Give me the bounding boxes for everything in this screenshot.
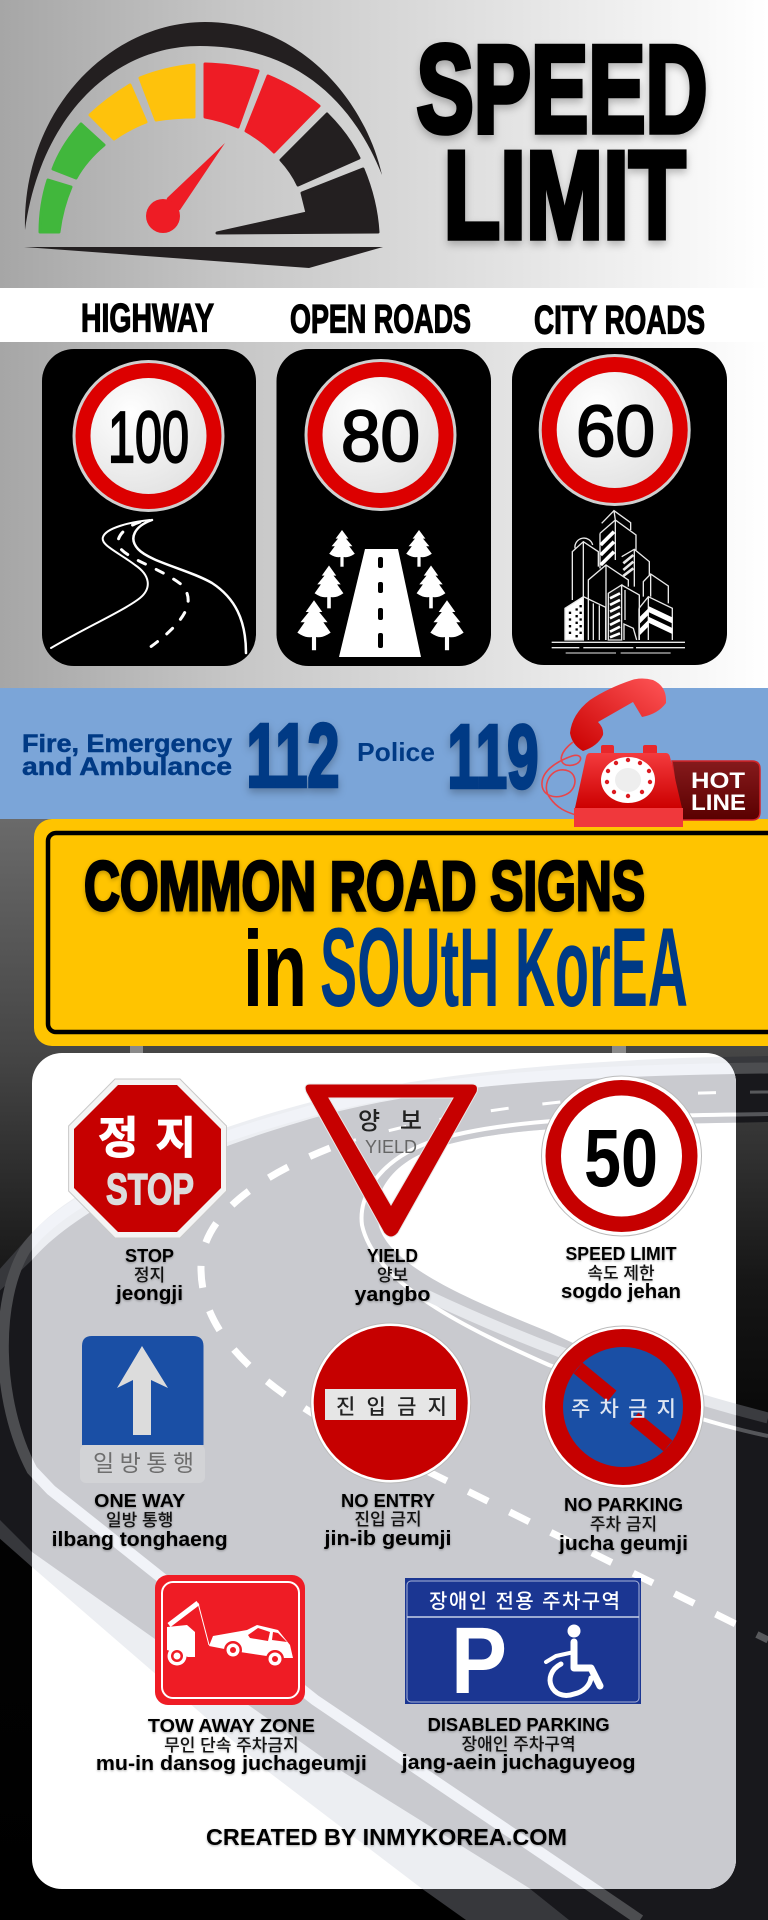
title: speed limit: LIMIT <box>444 127 686 265</box>
label: yield <box>354 1246 430 1306</box>
icon: city skyline <box>552 511 685 653</box>
panel: road signs <box>32 1053 736 1889</box>
label: tow away zone <box>96 1716 367 1775</box>
sign: 60 <box>539 354 691 506</box>
icon: wheelchair <box>546 1624 600 1695</box>
label: tow away zone: mu-in dansog juchageumji <box>96 1753 367 1775</box>
label: one way: 일방 통행 <box>106 1511 173 1530</box>
sign: stop: 정 지 <box>98 1114 196 1163</box>
sign: one way: 일방통행 <box>93 1450 194 1476</box>
label: no parking <box>558 1495 688 1555</box>
sign: one way <box>80 1336 205 1483</box>
label: no entry: NO ENTRY <box>341 1491 435 1511</box>
label: disabled parking: 장애인 주차구역 <box>461 1735 576 1754</box>
panel: emergency numbers band <box>0 688 768 819</box>
sign: no entry <box>311 1323 471 1483</box>
icon: hotline telephone <box>542 678 760 827</box>
sign: disabled parking: P <box>451 1608 507 1714</box>
text: fire, emergency and ambulance: Fire, Emergency <box>22 730 232 758</box>
sign: speed limit 50 <box>542 1076 702 1236</box>
label: stop <box>115 1246 183 1305</box>
sign: no parking: 주 차 금 지 <box>571 1398 676 1421</box>
icon: handset <box>570 678 666 751</box>
label: speed limit <box>561 1244 681 1303</box>
header background <box>0 0 768 288</box>
label: no parking: 주차 금지 <box>590 1515 657 1534</box>
sign: yield: 양 보 <box>358 1108 422 1135</box>
label strip background <box>0 288 768 342</box>
label: disabled parking: jang-aein juchaguyeog <box>401 1752 636 1774</box>
heading: open roads: OPEN ROADS <box>290 298 471 342</box>
label: no entry: jin-ib geumji <box>323 1528 452 1550</box>
credit: CREATED BY INMYKOREA.COM <box>206 1824 567 1850</box>
sign: 80 <box>304 359 456 511</box>
panel: open roads card <box>276 349 491 666</box>
sign: 100 <box>72 360 224 512</box>
label: speed limit: sogdo jehan <box>561 1281 681 1303</box>
number: 112: 112 <box>246 706 340 806</box>
sign: yield <box>305 1084 477 1237</box>
sign: speed limit 50: 50 <box>584 1113 658 1204</box>
hot line tag: LINE <box>691 790 746 815</box>
label: stop: jeongji <box>115 1283 183 1305</box>
text: in: in <box>243 908 307 1029</box>
number: 119: 119 <box>448 708 538 808</box>
icon: straight road <box>339 549 421 657</box>
label: tow away zone: TOW AWAY ZONE <box>148 1716 315 1736</box>
sign: stop <box>69 1079 226 1238</box>
sign posts <box>130 1045 626 1055</box>
sign: 60: 60 <box>576 392 655 472</box>
sign: tow away zone <box>155 1575 305 1705</box>
icon: winding road <box>51 520 246 653</box>
icon: telephone body <box>574 745 760 827</box>
label: stop: 정지 <box>134 1266 165 1285</box>
yellow road sign heading <box>34 819 768 1055</box>
sign: 80: 80 <box>341 397 420 477</box>
label: no parking: jucha geumji <box>558 1533 688 1555</box>
label: speed limit: SPEED LIMIT <box>566 1244 676 1264</box>
icon: trees <box>297 530 464 650</box>
sign: disabled parking <box>405 1578 641 1714</box>
panel: highway card <box>42 349 256 666</box>
sign: yield: YIELD <box>365 1137 417 1157</box>
sign: no entry: 진 입 금 지 <box>336 1396 447 1419</box>
panel: city roads card <box>512 348 727 665</box>
label: tow away zone: 무인 단속 주차금지 <box>164 1736 299 1755</box>
icon: tow truck and car <box>167 1603 293 1668</box>
label: yield: 양보 <box>377 1266 408 1285</box>
label: disabled parking: DISABLED PARKING <box>428 1715 610 1735</box>
label: no entry: 진입 금지 <box>354 1510 422 1529</box>
dark road background <box>0 819 768 1920</box>
label: one way: ONE WAY <box>94 1491 185 1511</box>
hot line tag <box>672 761 760 820</box>
label: yield: yangbo <box>354 1284 430 1306</box>
icon: speedometer gauge <box>24 22 383 268</box>
label: disabled parking <box>401 1715 636 1774</box>
label: one way: ilbang tonghaeng <box>52 1529 228 1551</box>
sign: no parking <box>542 1326 704 1488</box>
panel road artwork <box>32 1057 736 1889</box>
heading: highway: HIGHWAY <box>81 296 214 340</box>
icon: phone cord <box>542 742 581 815</box>
label: stop: STOP <box>125 1246 174 1266</box>
title: speed limit <box>416 21 708 265</box>
sign: 100: 100 <box>108 398 189 478</box>
label: no entry <box>323 1491 452 1550</box>
sign: stop: STOP <box>106 1165 194 1214</box>
label: yield: YIELD <box>367 1246 418 1266</box>
text: fire, emergency and ambulance: and Ambulance <box>22 753 232 781</box>
label: one way <box>52 1491 228 1551</box>
speed cards background <box>0 342 768 688</box>
sign: disabled parking: 장애인 전용 주차구역 <box>429 1590 620 1613</box>
text: police: Police <box>357 737 435 767</box>
label: speed limit: 속도 제한 <box>587 1264 655 1283</box>
text: fire, emergency and ambulance <box>22 730 232 781</box>
label: no parking: NO PARKING <box>564 1495 683 1515</box>
hot line tag: HOT <box>691 768 746 793</box>
